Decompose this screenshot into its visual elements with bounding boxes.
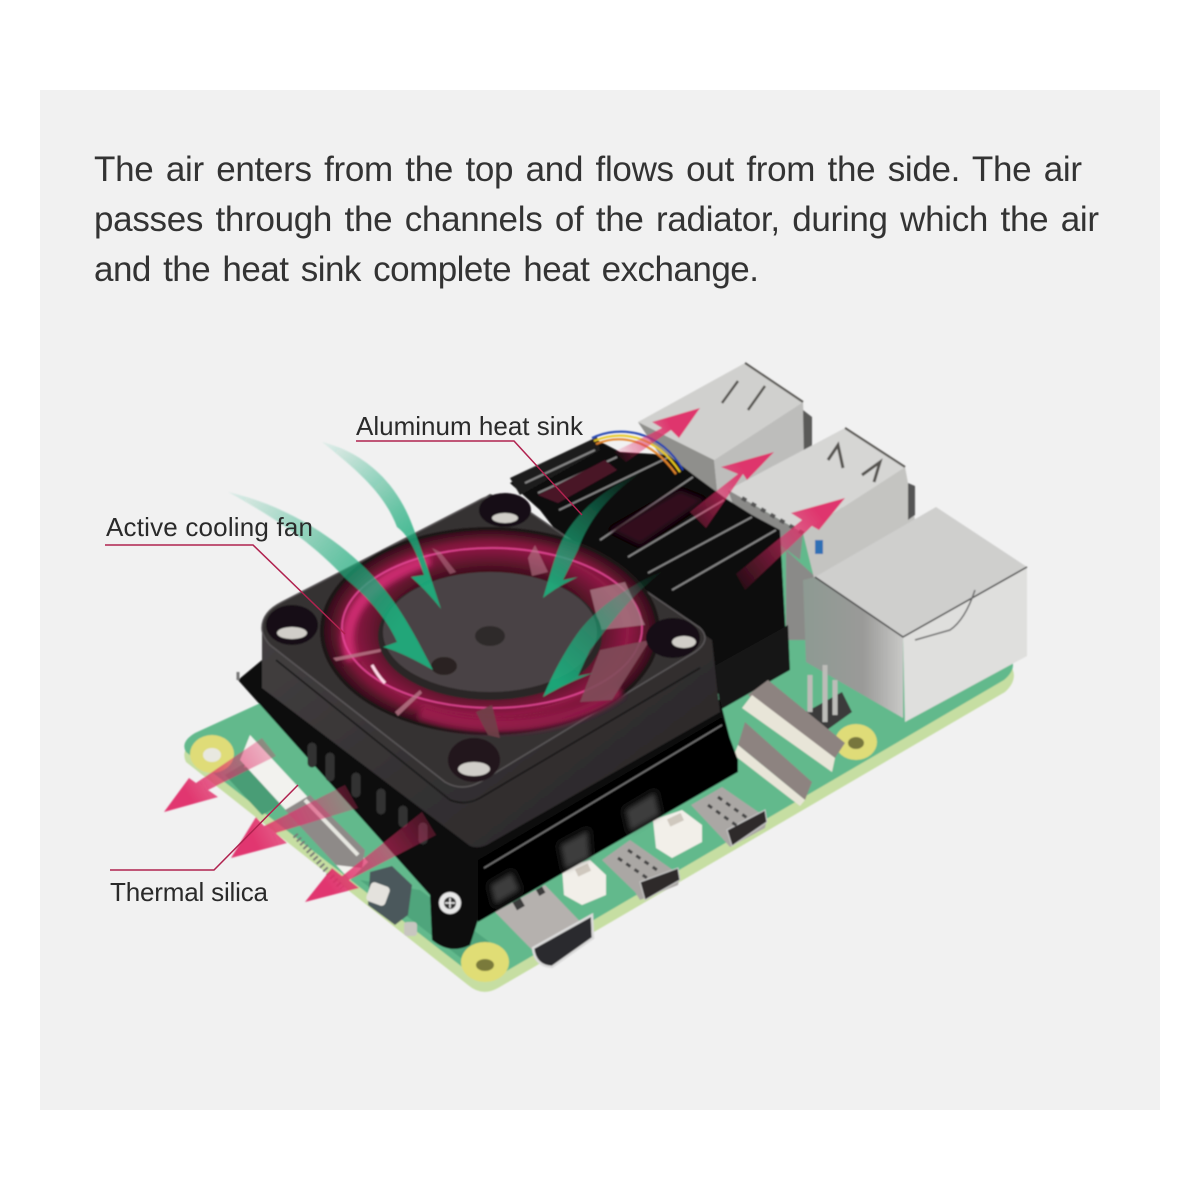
heat sink upper fins bbox=[510, 437, 790, 710]
pink outflow arrow left 3 bbox=[305, 812, 436, 902]
pink outflow arrow left 1 bbox=[164, 738, 276, 812]
product photo: single board computer with cooler bbox=[164, 363, 1027, 992]
label: Active cooling fan bbox=[105, 512, 345, 634]
label: Active cooling fan: Active cooling fan bbox=[106, 512, 313, 542]
USB port front bbox=[728, 428, 915, 640]
cooling fan body bbox=[262, 494, 720, 847]
label: Thermal silica bbox=[110, 785, 298, 907]
standoff post and screw bbox=[434, 892, 472, 948]
micro HDMI ports bbox=[602, 787, 767, 900]
heat sink base plate bbox=[478, 717, 738, 922]
green inflow arrow 1 bbox=[322, 442, 441, 609]
pink outflow arrow front USB bbox=[736, 498, 845, 590]
Ethernet port bbox=[803, 507, 1027, 722]
USB port rear bbox=[638, 363, 812, 520]
small board parts bbox=[365, 866, 417, 936]
description text: The air enters from the top and flows out from the side. The air bbox=[94, 150, 1082, 189]
green inflow arrow 2 bbox=[228, 492, 433, 670]
GPIO header pins bbox=[806, 665, 852, 735]
white JST connectors bbox=[562, 810, 702, 905]
USB-C port bbox=[495, 885, 593, 968]
green inflow arrow 3 bbox=[543, 470, 645, 598]
label: Aluminum heat sink: Aluminum heat sink bbox=[356, 411, 584, 441]
pink outflow arrow middle USB bbox=[690, 452, 774, 528]
pink outflow arrow rear USB bbox=[614, 408, 700, 462]
fan blades bbox=[333, 545, 650, 738]
description text: passes through the channels of the radiator, during which the air bbox=[94, 200, 1099, 239]
fan wires bbox=[592, 432, 683, 474]
description text bbox=[94, 150, 1099, 289]
green inflow arrow 4 bbox=[543, 570, 665, 697]
pink outflow arrow left 2 bbox=[231, 785, 358, 858]
mounting holes bbox=[190, 724, 877, 982]
description text: and the heat sink complete heat exchange. bbox=[94, 250, 759, 289]
ribbon connector left bbox=[240, 735, 368, 888]
fan rotor ring bbox=[320, 527, 660, 735]
ribbon connectors right bbox=[734, 680, 845, 806]
circuit board bbox=[184, 460, 1014, 992]
heat sink lower fins bbox=[238, 660, 738, 949]
label: Aluminum heat sink bbox=[356, 411, 584, 515]
label: Thermal silica: Thermal silica bbox=[110, 877, 269, 907]
fan corner screws bbox=[266, 493, 700, 782]
fan hub bbox=[378, 572, 602, 700]
background panel bbox=[40, 90, 1160, 1110]
